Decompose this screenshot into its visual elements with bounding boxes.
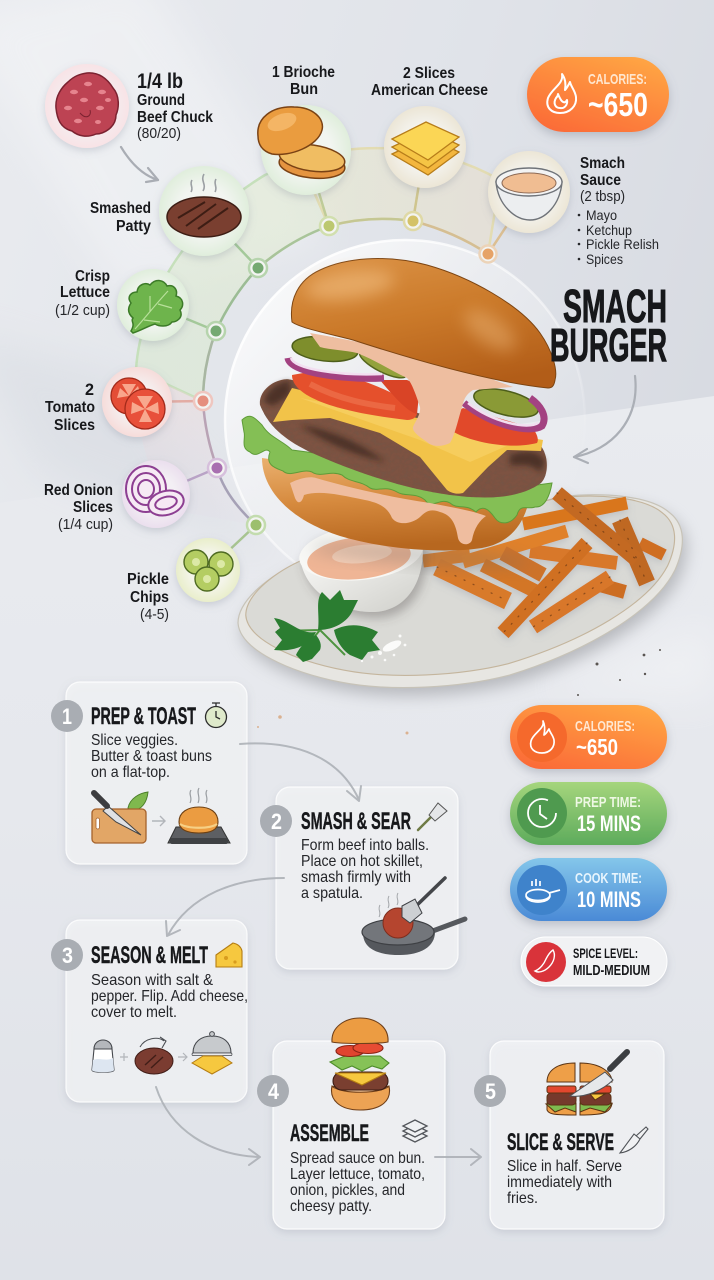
calories pill top <box>527 57 669 132</box>
bottom sauce drips <box>290 477 486 544</box>
icon: spatula <box>418 803 447 830</box>
stat pill: prep time: 15 MINS <box>577 811 641 836</box>
step 4 card: assemble: Spread sauce on bun. <box>290 1150 425 1167</box>
icon: burger cut in half with knife <box>546 1063 612 1115</box>
ingredient: pickle chips <box>127 538 240 623</box>
ingredient: lettuce: Crisp <box>75 268 110 285</box>
step 4 card: assemble: cheesy patty. <box>290 1198 372 1215</box>
step 3 card: season and melt: SEASON & MELT <box>91 942 208 969</box>
ingredient: smashed patty: Patty <box>116 218 151 235</box>
step 4 card: assemble: onion, pickles, and <box>290 1182 405 1199</box>
red onion rings <box>288 358 544 429</box>
step 3 card: season and melt <box>51 920 248 1102</box>
stat pill: calories <box>510 705 667 769</box>
step 1 card: prep and toast <box>51 682 247 864</box>
icon: bun on griddle <box>168 788 230 844</box>
salt crystals <box>361 634 406 662</box>
step 1 card: prep and toast: Butter & toast buns <box>91 748 212 765</box>
ingredient: smach sauce: Mayo <box>586 207 617 223</box>
stat pill: calories: CALORIES: <box>575 719 635 735</box>
step 1 card: prep and toast: 1 <box>62 704 72 729</box>
step 2 card: smash and sear: a spatula. <box>301 885 363 902</box>
ingredient: pickle chips: Chips <box>130 589 169 606</box>
step 2 card: smash and sear: 2 <box>271 809 282 834</box>
step 5 card: slice and serve: immediately with <box>507 1174 612 1191</box>
parsley garnish <box>274 590 380 662</box>
ingredient: ground beef: 1/4 lb <box>137 70 183 93</box>
step 1 card: prep and toast: Slice veggies. <box>91 732 178 749</box>
top brioche bun <box>291 259 556 388</box>
icon: layers <box>403 1120 427 1142</box>
ingredient: red onion: Red Onion <box>44 482 113 499</box>
ingredient: smach sauce: Pickle Relish <box>586 236 659 252</box>
plate <box>238 495 686 696</box>
icon: cloche and melted cheese <box>192 1032 232 1074</box>
lettuce layer <box>242 416 552 523</box>
ingredient: red onion: (1/4 cup) <box>58 516 113 533</box>
calories pill top: CALORIES: <box>588 71 647 88</box>
step 1 card: prep and toast: PREP & TOAST <box>91 703 196 730</box>
icon: cheese wedge <box>216 943 242 967</box>
ingredient: smach sauce: (2 tbsp) <box>580 188 625 205</box>
stat pill: prep time: PREP TIME: <box>575 795 641 811</box>
arc node markers <box>194 212 496 534</box>
ingredient: ground beef: (80/20) <box>137 125 181 142</box>
ingredient: tomato slices: Slices <box>54 417 95 434</box>
icon: stopwatch <box>206 703 226 728</box>
stat pill: cook time <box>510 858 667 921</box>
step 4 card: assemble: ASSEMBLE <box>290 1120 369 1147</box>
ingredient: smashed patty: Smashed <box>90 200 151 217</box>
step 5 card: slice and serve: SLICE & SERVE <box>507 1129 614 1156</box>
stat pill: spice level: MILD-MEDIUM <box>573 963 650 979</box>
ingredient: brioche bun <box>258 64 351 195</box>
ingredient: pickle chips: (4-5) <box>140 606 169 623</box>
sauce dipping bowl <box>297 520 425 612</box>
step 3 card: season and melt: 3 <box>62 943 73 968</box>
large white disc behind burger <box>225 240 585 600</box>
step 2 card: smash and sear: Form beef into balls. <box>301 837 429 854</box>
special sauce pour <box>310 333 513 446</box>
arrow <box>152 816 165 826</box>
stat pill: spice level <box>521 937 667 986</box>
ingredient: american cheese: 2 Slices <box>403 65 455 82</box>
icon: knife outline <box>620 1127 648 1153</box>
step 4 card: assemble <box>257 1018 445 1229</box>
ingredient: brioche bun: Bun <box>290 81 318 98</box>
tomato slices <box>292 370 538 446</box>
ingredient: red onion: Slices <box>73 499 113 516</box>
ingredient: tomato slices <box>45 367 172 437</box>
calories pill top: ~650 <box>588 86 648 123</box>
step 2 card: smash and sear: Place on hot skillet, <box>301 853 423 870</box>
bottom bun <box>262 458 527 550</box>
ingredient: tomato slices: 2 <box>85 380 94 399</box>
stat pill: prep time <box>510 782 667 845</box>
step 1 card: prep and toast: on a flat-top. <box>91 764 170 781</box>
ingredient: smashed patty <box>90 166 249 256</box>
ingredient: red onion <box>44 460 190 533</box>
melted cheese <box>273 388 543 494</box>
stat pill: calories: ~650 <box>576 734 618 760</box>
sweet potato fries <box>423 493 664 633</box>
ingredient: brioche bun: 1 Brioche <box>272 64 335 81</box>
ingredient: smach sauce <box>488 151 659 267</box>
ingredient: pickle chips: Pickle <box>127 571 169 588</box>
ingredient: ground beef: Beef Chuck <box>137 109 213 126</box>
arrow: beef to patty <box>121 147 158 182</box>
beef patty <box>260 379 547 497</box>
ingredient: smach sauce: Ketchup <box>586 222 632 238</box>
ingredient: lettuce: Lettuce <box>60 284 110 301</box>
flow arrows between steps <box>156 743 481 1165</box>
icon: patty with flip arrow <box>135 1037 173 1074</box>
icon: salt shaker <box>92 1040 114 1072</box>
step 3 card: season and melt: cover to melt. <box>91 1004 177 1021</box>
step 5 card: slice and serve <box>474 1041 664 1229</box>
ingredient: tomato slices: Tomato <box>45 399 95 416</box>
step 2 card: smash and sear <box>260 787 465 969</box>
step 4 card: assemble: 4 <box>268 1079 280 1104</box>
arrow: title to burger <box>574 376 636 463</box>
ingredient: ground beef <box>45 64 213 148</box>
pickle chips <box>291 334 541 423</box>
ingredient: lettuce <box>55 268 189 341</box>
step 3 card: season and melt: pepper. Flip. Add cheese, <box>91 988 248 1005</box>
ingredient: american cheese: American Cheese <box>371 82 488 99</box>
ingredient: american cheese <box>371 65 488 188</box>
icon: exploded burger stack <box>330 1018 390 1110</box>
stat pill: cook time: COOK TIME: <box>575 871 642 887</box>
ingredient: lettuce: (1/2 cup) <box>55 302 110 319</box>
step 5 card: slice and serve: Slice in half. Serve <box>507 1158 622 1175</box>
icon: skillet with meatball and spatula <box>362 878 465 955</box>
ingredient: ground beef: Ground <box>137 92 185 109</box>
step 5 card: slice and serve: fries. <box>507 1190 538 1207</box>
step 2 card: smash and sear: SMASH & SEAR <box>301 808 411 835</box>
step 4 card: assemble: Layer lettuce, tomato, <box>290 1166 425 1183</box>
step 5 card: slice and serve: 5 <box>485 1079 496 1104</box>
ingredient arc diagram <box>135 147 529 570</box>
burger hero <box>242 259 556 573</box>
step 2 card: smash and sear: smash firmly with <box>301 869 411 886</box>
ingredient: smach sauce: Spices <box>586 251 623 267</box>
icon: knife on cutting board <box>92 792 148 843</box>
ingredient: smach sauce: Smach <box>580 155 625 172</box>
title <box>550 280 667 371</box>
stat pill: cook time: 10 MINS <box>577 887 641 912</box>
step 3 card: season and melt: Season with salt & <box>91 972 213 989</box>
stat pill: spice level: SPICE LEVEL: <box>573 945 638 961</box>
ingredient: smach sauce: Sauce <box>580 172 621 189</box>
